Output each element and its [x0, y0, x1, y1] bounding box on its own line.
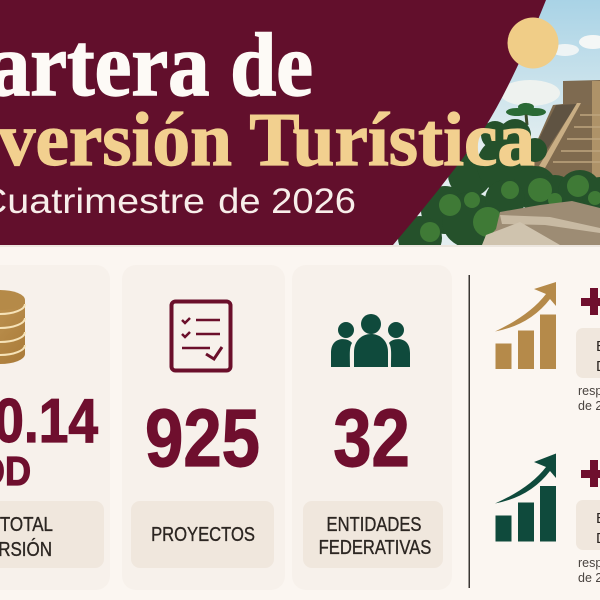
panel: total investment: [0, 265, 110, 590]
note: [578, 556, 600, 585]
panel: states: [292, 265, 452, 590]
label box: [303, 501, 443, 568]
value: projects: 925: [145, 392, 260, 484]
plus sign: [581, 288, 600, 315]
hero photo: pyramid landscape: [393, 0, 600, 245]
stat: growth green: [495, 454, 600, 585]
icon: coin stack: [0, 290, 25, 364]
plus sign: [581, 460, 600, 487]
label box: [576, 500, 600, 550]
title: [0, 15, 535, 182]
stat: growth gold: [495, 282, 600, 413]
panel: projects: [122, 265, 285, 590]
icon: checklist: [172, 302, 230, 370]
label box: [576, 328, 600, 378]
sun: [508, 18, 558, 68]
value: states: 32: [333, 392, 410, 484]
label box: FEDERATIVAS: [319, 536, 431, 558]
subtitle: [0, 181, 356, 221]
label box: PROYECTOS: [151, 523, 255, 545]
subtitle: de 2026: [218, 181, 356, 221]
icon: green bar chart: [495, 454, 556, 542]
note: [578, 384, 600, 413]
label box: [0, 501, 104, 568]
label box: [131, 501, 274, 568]
label box: ENTIDADES: [327, 513, 421, 535]
icon: people: [331, 314, 410, 367]
hero maroon banner: [0, 0, 546, 245]
icon: gold bar chart: [495, 282, 556, 369]
divider under hero: [0, 245, 600, 247]
